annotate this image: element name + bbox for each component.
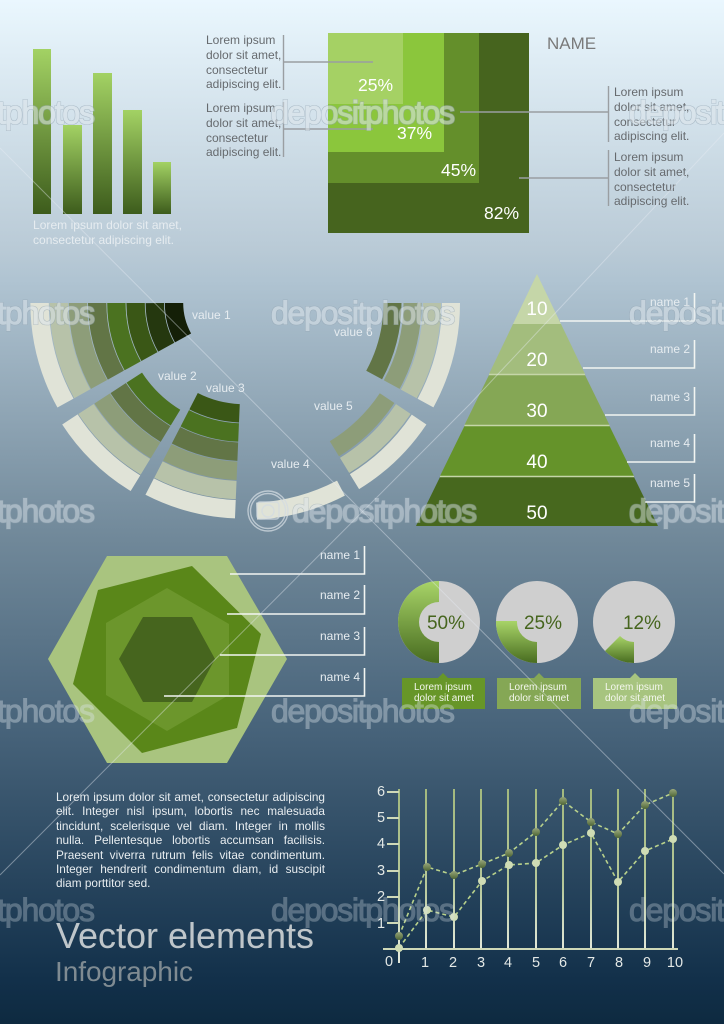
pyramid callouts: name 1 (650, 295, 690, 309)
donut: 12%: 12% (623, 613, 661, 634)
x axis labels: 4 (504, 955, 512, 971)
callout: left bottom: adipiscing elit. (206, 145, 281, 159)
pyramid chart: 30 (526, 401, 548, 422)
lower series markers (395, 829, 677, 952)
callout: left bottom (206, 101, 373, 159)
label box: 25%: dolor sit amet (509, 693, 569, 704)
fan chart: value 2 (0, 23, 527, 591)
label box: 12%: Lorem ipsum (605, 682, 663, 693)
fan chart: value 3 (29, 88, 459, 518)
x axis labels: 8 (615, 955, 623, 971)
y axis labels: 6 (377, 784, 385, 800)
label box: 25%: Lorem ipsum (509, 682, 567, 693)
chart grid and axes (383, 789, 678, 963)
watermark: depositphotos row 2 (0, 295, 724, 331)
callout: left bottom: dolor sit amet, (206, 116, 281, 130)
callout: right top (460, 85, 689, 143)
nested squares chart: 45% (441, 160, 476, 180)
pyramid chart: 10 (526, 299, 548, 320)
callout: left bottom: consectetur (206, 131, 268, 145)
y axis labels (377, 784, 385, 932)
x axis labels: 1 (421, 955, 429, 971)
line chart (377, 784, 683, 971)
x axis labels (385, 954, 683, 971)
fan chart: value 6 (33, 94, 451, 512)
watermark: depositphotos row 3: depositphotos (292, 493, 477, 529)
watermark: depositphotos row 5: depositphotos (271, 892, 455, 928)
donut: 25% (496, 581, 578, 663)
hexagon callouts: name 2 (320, 588, 360, 602)
body paragraph: Praesent viverra rutrum felis vitae condimentum. (56, 848, 325, 862)
nested squares chart: 82% (484, 203, 519, 223)
donut: 12% (593, 581, 675, 663)
body paragraph: tincidunt, scelerisque vel diam. Integer in mollis (56, 819, 325, 833)
callout: right top: consectetur (614, 115, 676, 129)
pyramid chart: 40 (526, 452, 548, 473)
label box: 50%: dolor sit amet (414, 693, 474, 704)
series: upper dashed line (399, 793, 673, 936)
nested squares chart: 25% (358, 75, 393, 95)
pyramid callouts: name 4 (650, 436, 690, 450)
fan chart labels (158, 308, 373, 471)
watermark: depositphotos row 1: depositphotos (271, 94, 455, 130)
hexagon callouts: name 4 (320, 670, 360, 684)
pyramid callouts: name 2 (650, 342, 690, 356)
x axis labels: 7 (587, 955, 595, 971)
watermark: depositphotos row 4: depositphotos (271, 693, 455, 729)
hexagon chart (48, 556, 287, 763)
donut: 50% (398, 581, 480, 663)
pyramid chart: 50 (526, 503, 548, 524)
callout: right bottom: consectetur (614, 180, 676, 194)
x axis labels: 6 (559, 955, 567, 971)
label box: 50%: Lorem ipsum (414, 682, 472, 693)
hexagon callouts (164, 546, 364, 696)
callout: left bottom: Lorem ipsum (206, 101, 275, 115)
callout: right top: Lorem ipsum (614, 85, 683, 99)
x axis labels: 2 (449, 955, 457, 971)
y axis labels: 1 (377, 916, 385, 932)
y axis labels: 3 (377, 863, 385, 879)
callout: right bottom: dolor sit amet, (614, 165, 689, 179)
x axis labels: 3 (477, 955, 485, 971)
callout: left top: adipiscing elit. (206, 77, 281, 91)
pyramid callouts (560, 293, 694, 502)
fan chart labels: value 3 (206, 381, 245, 395)
nested squares chart (328, 33, 529, 233)
bar chart caption (33, 218, 182, 247)
subtitle: Infographic (55, 956, 193, 987)
body paragraph: nulla. Pellentesque lobortis accumsan facilisis. (56, 833, 325, 847)
callout: left top (206, 33, 373, 91)
fan chart labels: value 2 (158, 369, 197, 383)
x axis labels: 0 (385, 954, 393, 970)
body paragraph: Integer hendrerit condimentum diam, id suscipit (56, 862, 325, 876)
y axis labels: 5 (377, 810, 385, 826)
body paragraph: Lorem ipsum dolor sit amet, consectetur adipiscing (56, 790, 325, 804)
icon: watermark camera (248, 491, 288, 531)
title: Vector elements (56, 915, 314, 956)
callout: right top: dolor sit amet, (614, 100, 689, 114)
label box: 25% (497, 673, 581, 709)
watermark: depositphotos row 1 (0, 94, 724, 130)
pyramid callouts: name 3 (650, 390, 690, 404)
upper series markers (395, 789, 677, 940)
watermark: depositphotos row 4 (0, 693, 724, 729)
pyramid chart: 20 (526, 350, 548, 371)
x axis labels: 10 (667, 955, 683, 971)
bar chart caption: consectetur adipiscing elit. (33, 233, 174, 247)
watermark: depositphotos row 2: depositphotos (271, 295, 455, 331)
fan chart labels: value 1 (192, 308, 231, 322)
label box: 12% (593, 673, 677, 709)
donut: 25%: 25% (524, 613, 562, 634)
bar chart (33, 49, 171, 214)
donut: 50%: 50% (427, 613, 465, 634)
watermark diagonal lines (0, 133, 724, 875)
body paragraph: diam porttitor sed. (56, 876, 150, 890)
x axis labels: 9 (643, 955, 651, 971)
fan chart labels: value 6 (334, 325, 373, 339)
callout: right bottom (519, 150, 689, 208)
fan chart: value 1 (0, 22, 527, 584)
pyramid chart (416, 274, 658, 526)
callout: left top: dolor sit amet, (206, 48, 281, 62)
x axis labels: 5 (532, 955, 540, 971)
callout: left top: Lorem ipsum (206, 33, 275, 47)
fan chart: value 4 (0, 22, 526, 584)
hexagon callouts: name 3 (320, 629, 360, 643)
callout: right top: adipiscing elit. (614, 129, 689, 143)
fan chart: value 5 (0, 12, 536, 594)
bar chart caption: Lorem ipsum dolor sit amet, (33, 218, 182, 232)
callout: right bottom: Lorem ipsum (614, 150, 683, 164)
watermark: depositphotos row 3 (0, 493, 724, 529)
pyramid callouts: name 5 (650, 476, 690, 490)
y axis labels: 2 (377, 889, 385, 905)
fan chart labels: value 4 (271, 457, 310, 471)
hexagon callouts: name 1 (320, 548, 360, 562)
callout: right bottom: adipiscing elit. (614, 194, 689, 208)
label box: 12%: dolor sit amet (605, 693, 665, 704)
callout: left top: consectetur (206, 63, 268, 77)
series: lower dashed line (399, 833, 673, 948)
watermark: depositphotos row 5 (0, 892, 724, 928)
nested squares chart: 37% (397, 123, 432, 143)
body paragraph: elit. Integer nisl ipsum, lobortis nec malesuada (56, 804, 325, 818)
body paragraph (56, 790, 325, 894)
label box: 50% (402, 673, 485, 709)
fan chart labels: value 5 (314, 399, 353, 413)
heading: name: NAME (547, 34, 596, 53)
y axis labels: 4 (377, 836, 385, 852)
